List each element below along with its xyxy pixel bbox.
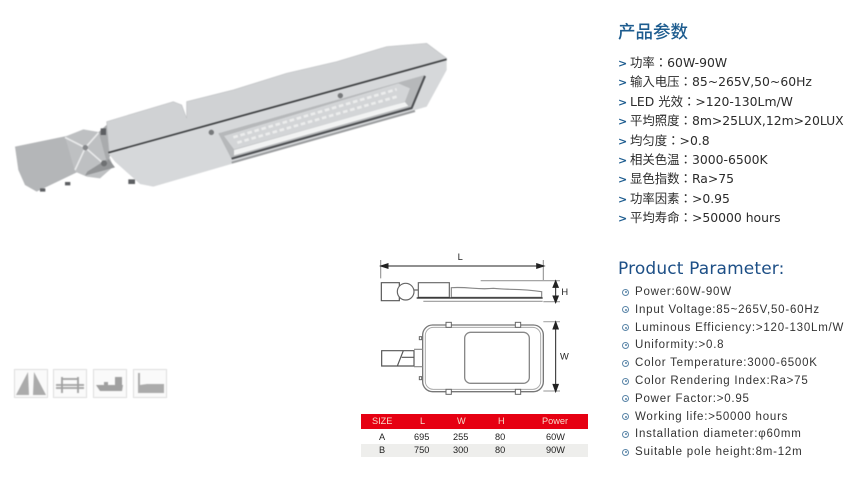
table header: H — [498, 416, 505, 426]
dimension diagram: W — [560, 351, 569, 361]
item: 显色指数：Ra>75 — [630, 171, 734, 186]
item: 平均寿命：>50000 hours — [630, 210, 781, 225]
table row B: B — [379, 445, 385, 455]
item: Power Factor:>0.95 — [635, 393, 750, 405]
table row A — [361, 430, 588, 443]
item: > — [618, 135, 627, 148]
item: 输入电压：85~265V,50~60Hz — [630, 74, 812, 89]
item: > — [618, 115, 627, 128]
item: Color Temperature:3000-6500K — [635, 357, 818, 369]
item: > — [618, 212, 627, 225]
Chinese parameter list — [618, 55, 844, 225]
dimension diagram: L — [458, 252, 463, 262]
item: LED 光效：>120-130Lm/W — [630, 94, 793, 109]
item: Input Voltage:85~265V,50-60Hz — [635, 304, 820, 316]
size table — [361, 414, 588, 457]
item: 功率因素：>0.95 — [630, 191, 730, 206]
item: > — [618, 57, 627, 70]
heading: Product Parameter: Product Parameter: — [618, 259, 785, 279]
icon: ship — [92, 368, 128, 398]
table header: W — [457, 416, 466, 426]
table row A: 695 — [414, 432, 429, 442]
table row A: 255 — [453, 432, 468, 442]
table row A: A — [379, 432, 385, 442]
item: Luminous Efficiency:>120-130Lm/W — [635, 322, 844, 334]
table header: L — [420, 416, 425, 426]
table header: Power — [542, 416, 568, 426]
table row A: 80 — [495, 432, 505, 442]
table row B: 750 — [414, 445, 429, 455]
table row B: 300 — [453, 445, 468, 455]
item: > — [618, 96, 627, 109]
table row B: 90W — [546, 445, 565, 455]
table header — [361, 414, 588, 429]
icons: application scenes — [14, 368, 168, 398]
table row B: 80 — [495, 445, 505, 455]
table header: SIZE — [372, 416, 392, 426]
item: Power:60W-90W — [635, 286, 732, 298]
dimension diagram: H — [561, 287, 568, 297]
heading: Chinese parameters: 产品参数 — [618, 19, 688, 44]
item: Working life:>50000 hours — [635, 411, 788, 423]
item: 功率：60W-90W — [630, 55, 727, 70]
item: 相关色温：3000-6500K — [630, 152, 768, 167]
item: 均匀度：>0.8 — [630, 133, 710, 148]
icon: factory — [132, 368, 168, 398]
icon: bridge — [52, 368, 88, 398]
English parameter list — [622, 286, 844, 458]
icon: road — [14, 368, 48, 398]
item: > — [618, 154, 627, 167]
item: > — [618, 193, 627, 206]
item: Uniformity:>0.8 — [635, 339, 724, 351]
item: > — [618, 76, 627, 89]
icon: street lamp product photo — [14, 42, 448, 192]
dimension diagram — [379, 252, 569, 395]
item: Suitable pole height:8m-12m — [635, 446, 802, 458]
item: 平均照度：8m>25LUX,12m>20LUX — [630, 113, 844, 128]
item: Installation diameter:φ60mm — [635, 428, 802, 440]
item: Color Rendering Index:Ra>75 — [635, 375, 809, 387]
table row A: 60W — [546, 432, 565, 442]
table row B — [361, 444, 588, 457]
item: > — [618, 173, 627, 186]
